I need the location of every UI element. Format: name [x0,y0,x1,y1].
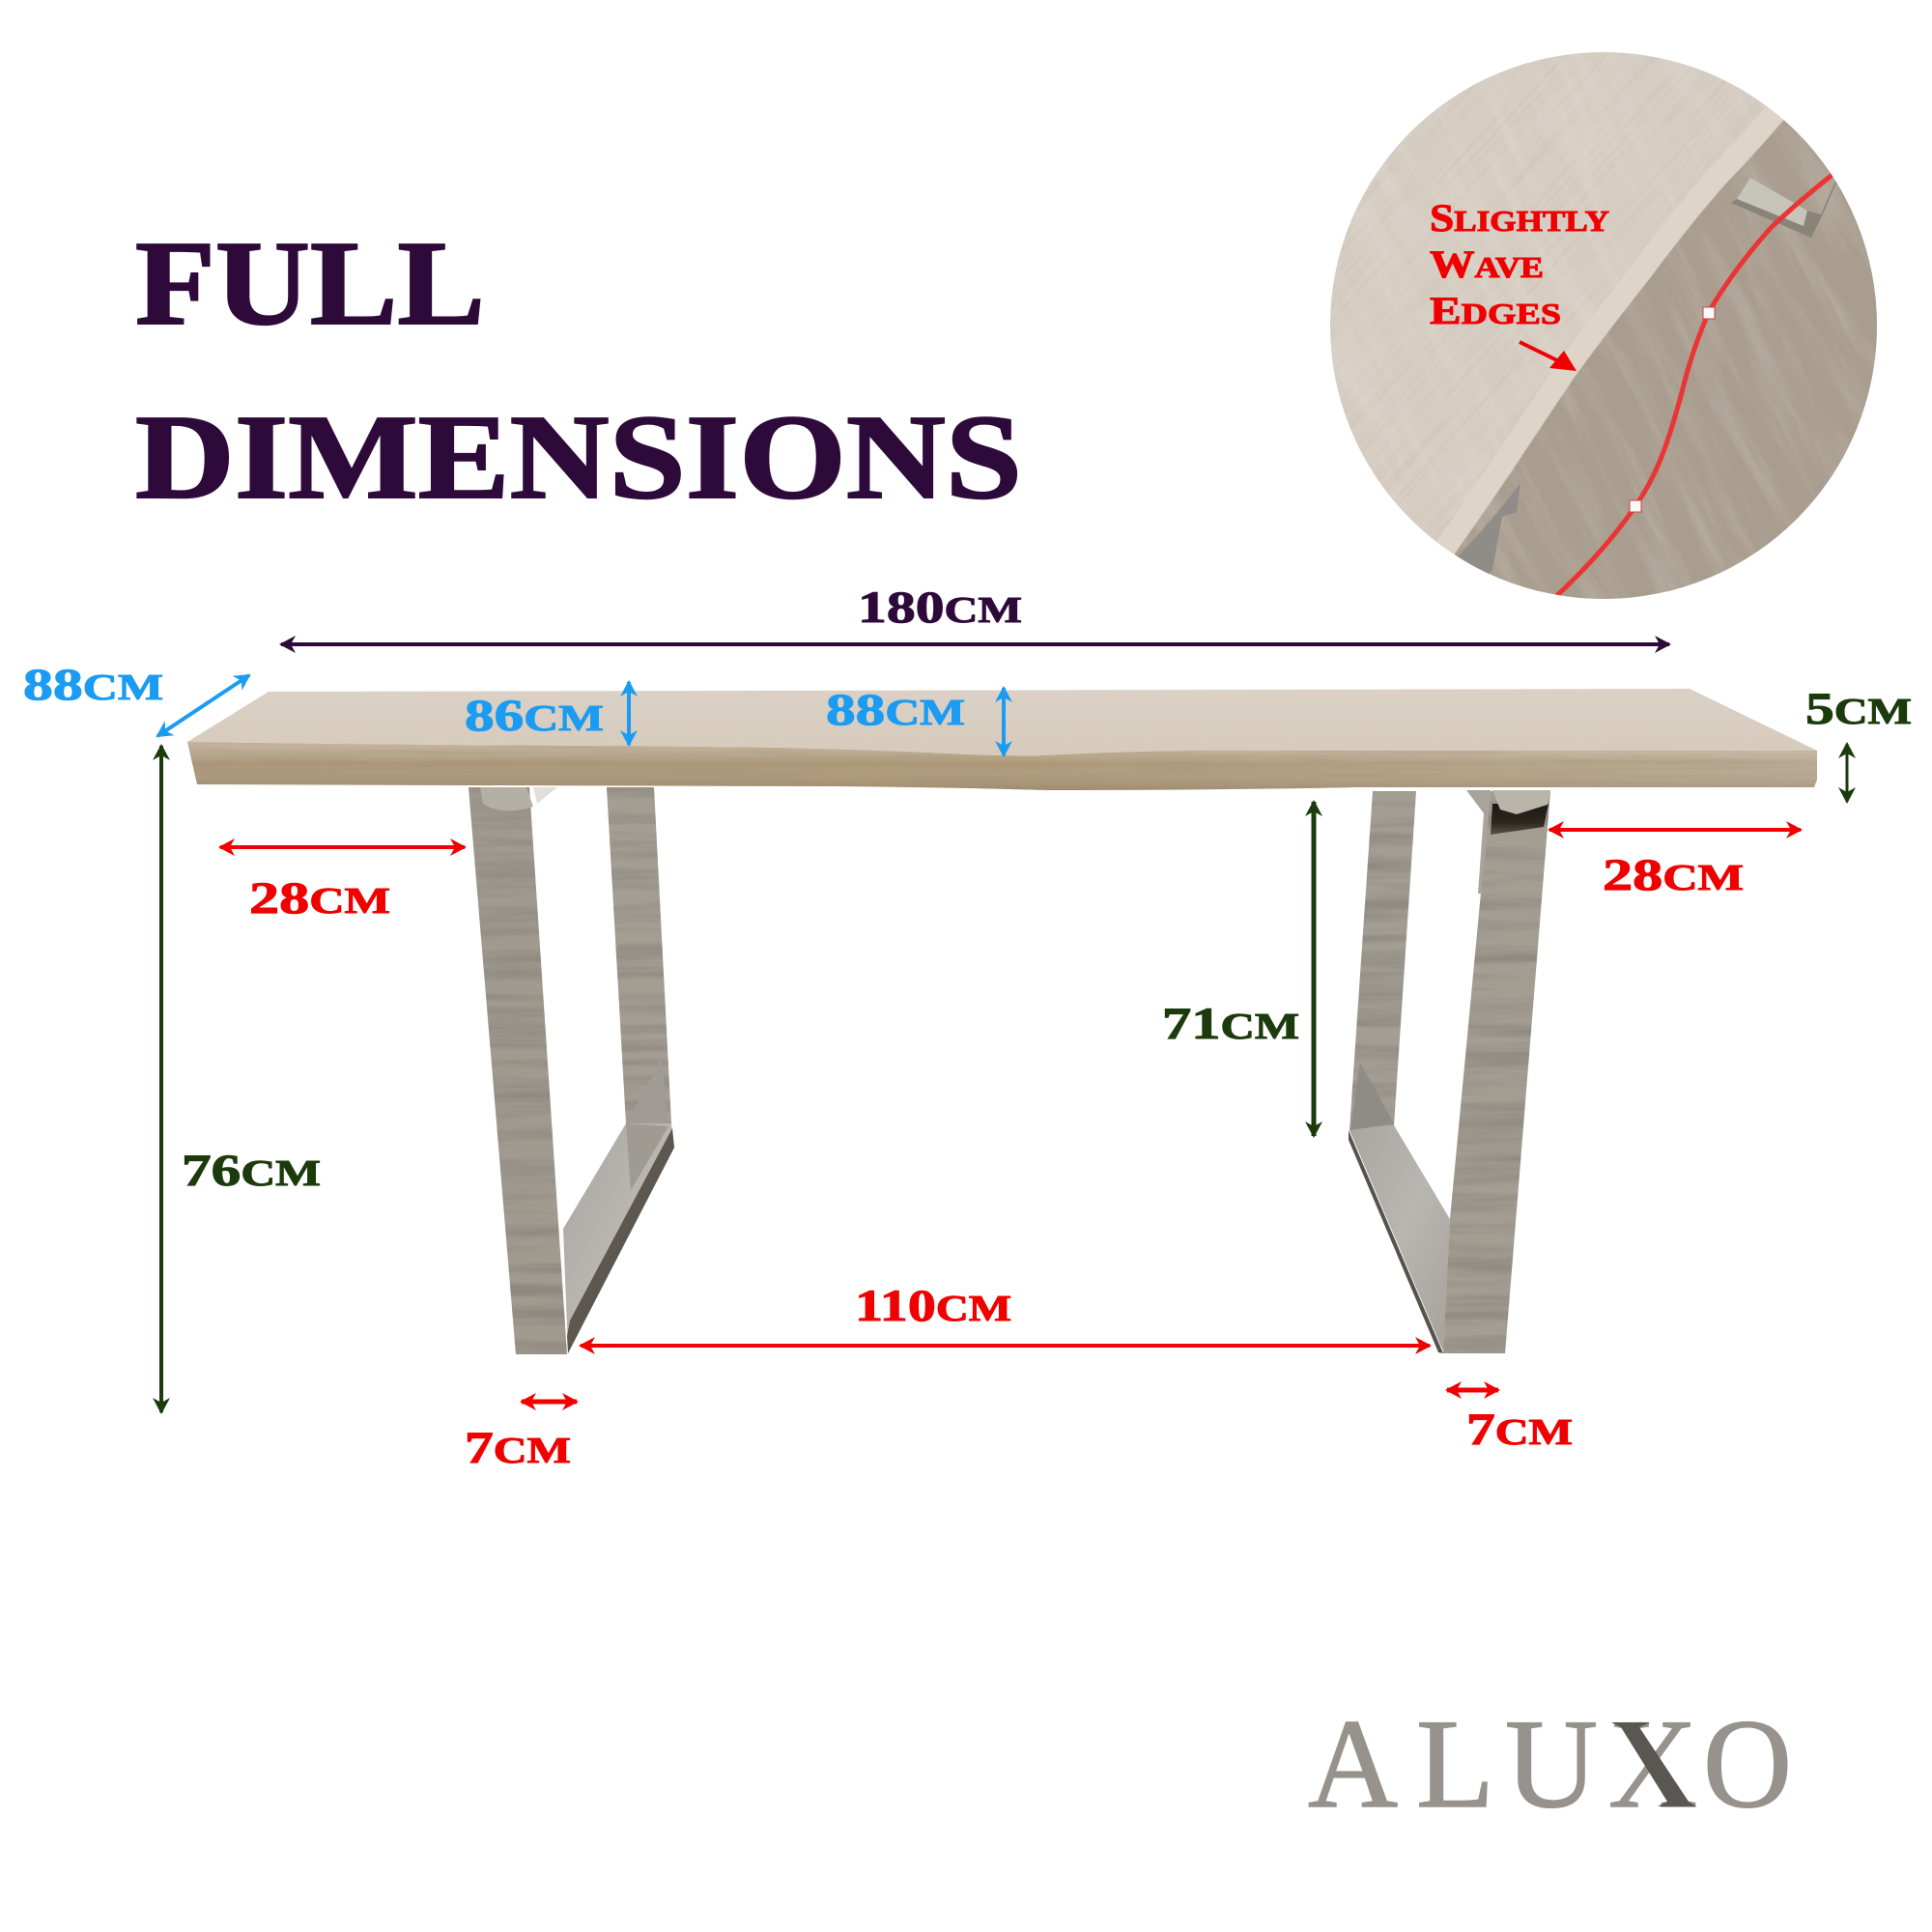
handle: upper [1703,307,1715,319]
table top [184,689,1826,797]
dimension: thickness 5cm: 5CM [1805,684,1912,734]
logo: aluxo: A [1308,1692,1398,1834]
dimension: width 88cm: 88 CM [826,685,965,735]
table: right leg [1343,787,1555,1357]
dimension: depth 88cm left: 88 CM [23,660,163,710]
handle: lower [1630,500,1641,512]
logo: aluxo: O [1703,1692,1792,1834]
panel: wavy edge detail circle [1330,52,1877,599]
callout: slightly wave edges: WAVE [1430,242,1544,286]
title: full dimensions [135,217,1022,525]
dimension: leg width 7cm right [1447,1390,1573,1455]
dimension: overhang 28cm left: 28 CM [249,873,390,923]
dimension: overhang 28cm right: 28 CM [1603,850,1744,900]
callout: slightly wave edges: EDGES [1430,289,1561,332]
dimension: leg width 7cm right: 7CM [1466,1405,1573,1455]
logo: aluxo [1308,1692,1792,1834]
dimension: depth 88cm left [23,660,249,736]
dimension: leg spacing 110cm: 110 CM [855,1281,1011,1331]
dimension: height 76cm: 76 CM [182,1146,321,1196]
table surface [187,689,1817,755]
table: left leg [464,782,686,1362]
dimension: leg height 71cm: 71 CM [1162,999,1299,1049]
dimension: overall length 180cm: 180 CM [858,582,1022,633]
logo: aluxo: X [1608,1692,1697,1834]
red wave curve [1553,174,1833,599]
arrow: callout pointer [1520,342,1577,371]
dimension: width 86cm: 86 CM [465,691,604,741]
dimension: thickness 5cm [1805,684,1912,802]
floor shadow corner [1457,483,1520,574]
title: full dimensions: DIMENSIONS [135,391,1022,525]
dimension: leg width 7cm left [465,1402,577,1473]
callout: slightly wave edges: SLIGHTLY [1430,196,1609,240]
table edge highlight [1440,106,1780,554]
logo: aluxo: U [1505,1692,1598,1834]
table leg reflection [1737,178,1807,226]
callout: slightly wave edges [1430,196,1609,332]
dimension: leg width 7cm left: 7CM [465,1423,571,1473]
title: full dimensions: FULL [135,217,485,351]
logo: aluxo: L [1416,1692,1494,1834]
floor [1455,120,1877,599]
